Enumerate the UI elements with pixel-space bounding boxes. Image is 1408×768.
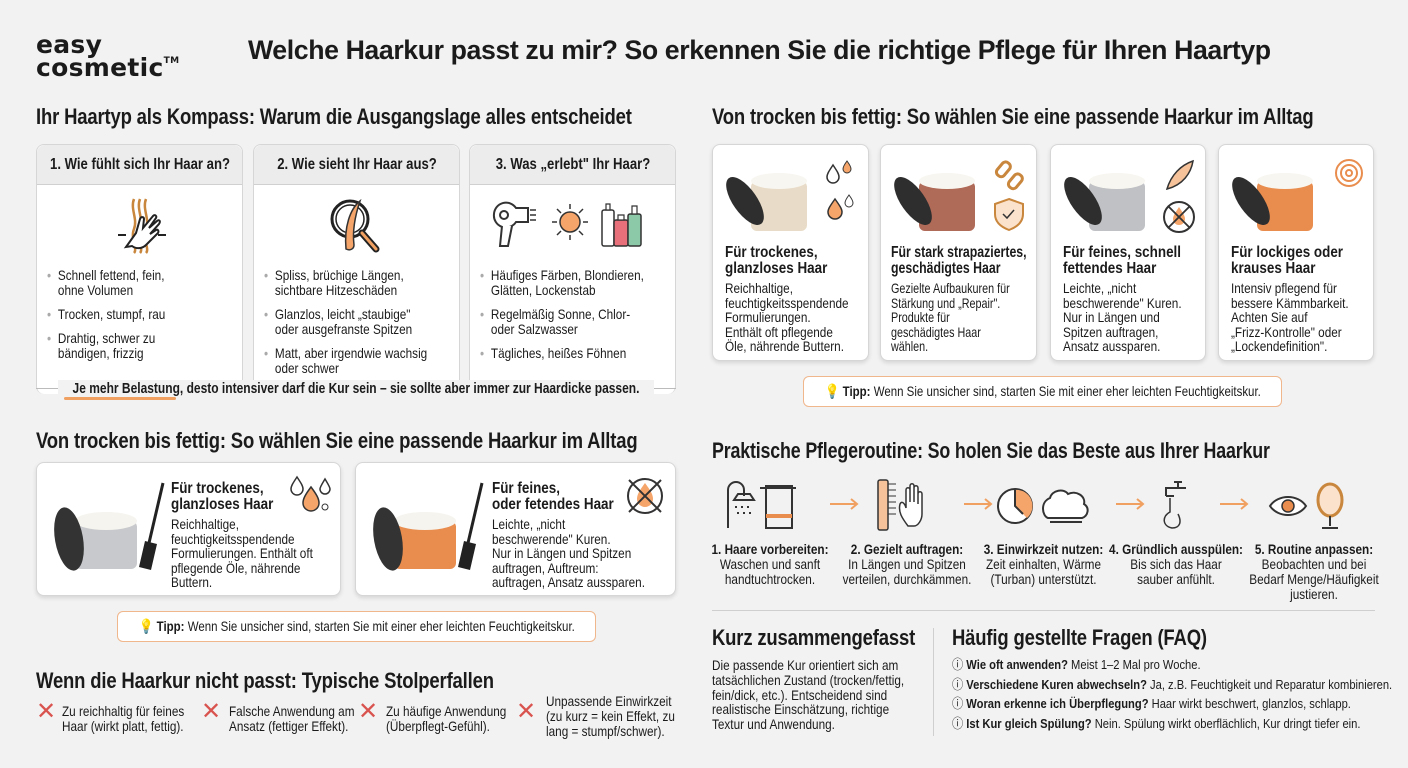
card: strapaziert: geschädigtes Haar [891,260,1001,277]
card: trocken [712,144,869,361]
panel: left card fine hair: Für feines, [492,480,560,497]
text block: Kurz zusammengefasst: Die passende Kur orientiert sich am tatsächlichen Zustand (trocken/fettig, fein/dick, etc.). Entscheidend sind realistische Einschätzung, richtige Textur und Anwendung. [712,657,904,732]
card 2: Spliss, brüchige Längen, sichtbare Hitzeschäden [275,267,404,298]
card 3: Häufiges Färben, Blondieren, Glätten, Lockenstab [491,267,644,298]
pitfall 2: ✕ [201,698,221,725]
card: trocken: Öle, nährende Buttern. [725,338,844,354]
text block: FAQ [952,625,1392,730]
card: trocken: Enthält oft pflegende [725,324,833,340]
card: trocken: feuchtigkeitsspendende Formulierungen. [725,294,849,325]
card 3: Tägliches, heißes Föhnen [491,345,626,361]
panel: left card fine hair [355,462,676,596]
logo [36,30,179,82]
card 2: Glanzlos, leicht „staubige" [275,306,410,322]
card: lockig: Für lockiges oder [1231,244,1343,261]
callout: tipp left [117,611,596,642]
callout: Belastung note: Je mehr Belastung, desto intensiver darf die Kur sein – sie sollte aber immer zur Haardicke passen. [73,380,639,397]
step 3: Zeit einhalten, Wärme [986,556,1101,572]
step 5: justieren. [1290,586,1338,602]
panel: left card dry hair: feuchtigkeitsspendende Formulierungen. Enthält oft pflegende Öle, nährende Buttern. [171,530,313,590]
text block: FAQ: ⓘ Wie oft anwenden? Meist 1–2 Mal pro Woche. [952,657,1201,672]
card 1: 1. Wie fühlt sich Ihr Haar an? [50,156,229,173]
icon: drops [290,476,331,512]
callout: tipp left: 💡 Tipp: Wenn Sie unsicher sind, starten Sie mit einer eher leichten Feuchtigkeitskur. [139,618,574,634]
pitfall 3: Zu häufige Anwendung (Überpflegt-Gefühl). [386,703,506,734]
card: strapaziert: geschädigtes Haar [891,324,981,340]
icons row [727,479,1344,531]
logo: cosmeticTM [36,53,179,82]
pitfall 1: ✕ [36,698,56,725]
step 5: Beobachten und bei [1262,556,1366,572]
card 1 [36,144,243,394]
card 1: bändigen, frizzig [58,345,144,361]
card 2 [253,144,460,394]
icons: dryer, sun, bottles [492,202,642,247]
heading: Haartyp Kompass: Ihr Haartyp als Kompass: Warum die Ausgangslage alles entscheidet [36,104,632,129]
step 4: Bis sich das Haar [1130,556,1222,572]
step 5: 5. Routine anpassen: [1255,541,1373,557]
text block: FAQ: Häufig gestellte Fragen (FAQ) [952,625,1207,650]
icon: orange jar with brush [373,482,484,571]
card: fein: beschwerende" Kuren. [1063,294,1182,310]
panel: left card dry hair: glanzloses Haar [171,496,273,513]
step 5: Bedarf Menge/Häufigkeit [1249,571,1379,587]
text block: Kurz zusammengefasst [712,625,916,732]
panel: left card dry hair: Reichhaltige, [171,516,239,532]
pitfall 4: ✕ [516,698,536,725]
callout: tipp right: 💡 Tipp: Wenn Sie unsicher sind, starten Sie mit einer eher leichten Feuchtigkeitskur. [825,383,1260,399]
card: fein: Für feines, schnell [1063,244,1181,261]
icon: hand touching hair [118,198,166,254]
text block: FAQ: ⓘ Verschiedene Kuren abwechseln? Ja, z.B. Feuchtigkeit und Reparatur kombinieren. [952,676,1392,692]
card: lockig [1218,144,1374,361]
card 1: Drahtig, schwer zu [58,330,155,346]
card: fein: Nur in Längen und [1063,309,1160,325]
card: fein: Spitzen auftragen, [1063,324,1158,340]
step 2: verteilen, durchkämmen. [843,571,971,587]
text block: Kurz zusammengefasst: Kurz zusammengefasst [712,625,915,650]
step 3: 3. Einwirkzeit nutzen: [984,541,1103,557]
card 2: oder ausgefranste Spitzen [275,321,412,337]
card: fein [1050,144,1206,361]
card: fein: Ansatz aussparen. [1063,338,1160,354]
icon: magnifier with hair [330,199,380,252]
panel: four product cards [711,144,1375,364]
panel: left card fine hair: Leichte, „nicht [492,516,565,532]
step 1: handtuchtrocken. [725,571,815,587]
card: lockig: Intensiv pflegend für bessere Kämmbarkeit. Achten Sie auf [1231,280,1349,325]
step 3 [984,541,1103,587]
step 4 [1109,541,1243,587]
panel: pitfalls [36,693,675,739]
card: fein: fettendes Haar [1063,260,1156,277]
title: Welche Haarkur passt zu mir? So erkennen Sie die richtige Pflege für Ihren Haartyp [248,35,1271,65]
card: strapaziert: Für stark strapaziertes, [891,244,1027,261]
heading: trocken bis fettig right: Von trocken bis fettig: So wählen Sie eine passende Haarkur im Alltag [712,104,1313,129]
card 3 [469,144,676,394]
card 1: ohne Volumen [58,282,133,298]
card: lockig: „Frizz-Kontrolle" oder „Lockendefinition". [1231,324,1342,354]
step 4: 4. Gründlich ausspülen: [1109,541,1243,557]
card 3: Regelmäßig Sonne, Chlor- [491,306,630,322]
step 5 [1249,541,1379,602]
card: strapaziert: Gezielte Aufbaukuren für [891,280,1010,296]
card 2: 2. Wie sieht Ihr Haar aus? [277,156,436,173]
step 1: Waschen und sanft [720,556,820,572]
step 2 [842,541,971,587]
text block: FAQ: ⓘ Woran erkenne ich Überpflegung? Haar wirkt beschwert, glanzlos, schlapp. [952,696,1351,711]
card 3: oder Salzwasser [491,321,578,337]
card: trocken: Für trockenes, [725,244,818,261]
logo: easy [36,30,102,59]
card: trocken: Reichhaltige, [725,280,793,296]
panel: left card dry hair [36,462,341,596]
step 2: In Längen und Spitzen [848,556,966,572]
pitfall 4: Unpassende Einwirkzeit (zu kurz = kein Effekt, zu lang = stumpf/schwer). [546,693,675,739]
step 2: 2. Gezielt auftragen: [851,541,963,557]
card: strapaziert: Stärkung und „Repair". [891,294,1000,310]
pitfall 3 [358,698,506,734]
pitfall 2: Falsche Anwendung am Ansatz (fettiger Effekt). [229,703,355,734]
card: strapaziert [880,144,1037,361]
pitfall 3: ✕ [358,698,378,725]
callout: tipp right [803,376,1282,407]
card: fein: Leichte, „nicht [1063,280,1136,296]
panel: left card fine hair: Nur in Längen und Spitzen auftragen, Auftreum: auftragen, Ansatz aussparen. [492,545,645,590]
card: strapaziert: Produkte für [891,309,950,325]
panel: three hair-type cards [36,144,676,394]
card 2: Matt, aber irgendwie wachsig oder schwer [275,345,427,376]
card 1: Trocken, stumpf, rau [58,306,165,322]
card: trocken: glanzloses Haar [725,260,827,277]
card: lockig: krauses Haar [1231,260,1315,277]
card 1: Schnell fettend, fein, [58,267,164,283]
step 4: sauber anfühlt. [1137,571,1215,587]
step 1: 1. Haare vorbereiten: [711,541,828,557]
heading: trocken bis fettig left: Von trocken bis fettig: So wählen Sie eine passende Haarkur im Alltag [36,428,637,453]
icon: crossed drop [627,478,663,514]
panel: left card fine hair: oder fetendes Haar [492,496,614,513]
text block: FAQ: ⓘ Ist Kur gleich Spülung? Nein. Spülung wirkt oberflächlich, Kur dringt tiefer ein. [952,716,1360,730]
step 1 [711,541,828,587]
heading: Stolperfallen: Wenn die Haarkur nicht passt: Typische Stolperfallen [36,668,494,693]
heading: Pflegeroutine: Praktische Pflegeroutine: So holen Sie das Beste aus Ihrer Haarkur [712,438,1270,463]
card: strapaziert: wählen. [891,338,928,354]
panel: routine steps [711,479,1379,602]
panel: left card dry hair: Für trockenes, [171,480,264,497]
pitfall 1: Zu reichhaltig für feines Haar (wirkt platt, fettig). [62,703,184,734]
icon: silver jar with brush [54,482,164,571]
card 3: 3. Was „erlebt" Ihr Haar? [495,156,650,173]
step 3: (Turban) unterstützt. [990,571,1097,587]
panel: left card fine hair: beschwerende" Kuren. [492,530,611,546]
